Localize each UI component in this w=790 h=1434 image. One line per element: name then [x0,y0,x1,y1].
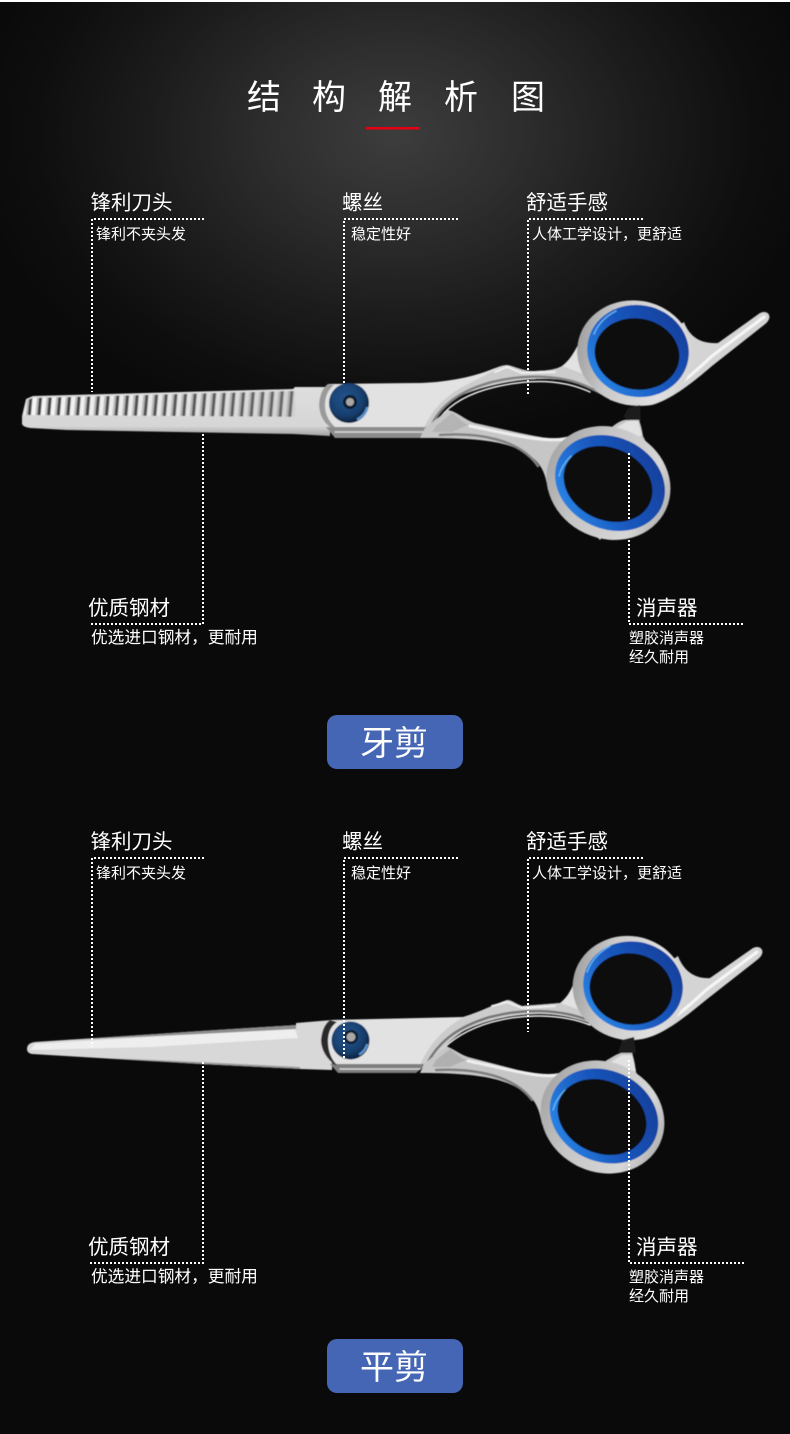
section: thinning shears callouts top [88,192,745,666]
callout: comfortable grip [526,192,682,394]
callout: comfortable grip: 舒适手感 [526,830,608,854]
lower handle [420,410,660,540]
callout: quality steel: 优选进口钢材，更耐用 [91,628,258,647]
callout: quality steel [88,1062,258,1286]
pivot screw [319,383,369,427]
section: flat shears callouts [88,830,745,1305]
flat blade [27,1020,332,1070]
pivot screw [321,1020,370,1065]
pivot bottom strip [330,1064,427,1073]
title: 结构解析图 [247,79,545,117]
callout: silencer: 经久耐用 [629,1288,689,1305]
pivot bottom strip [326,427,431,438]
callout: screw: 稳定性好 [351,865,411,882]
upper handle [319,312,769,428]
callout: comfortable grip: 人体工学设计，更舒适 [532,226,682,243]
upper handle [321,947,762,1065]
button: flat shears [327,1339,463,1393]
callout: screw: 螺丝 [342,192,383,214]
upper finger ring [569,291,701,415]
button: thinning shears [327,715,463,769]
callout: sharp tip: 锋利刀头 [90,192,172,214]
callout: quality steel: 优质钢材 [88,597,170,620]
callout: screw [342,192,458,386]
callout: silencer: 塑胶消声器 [629,1268,704,1286]
lower handle [420,1046,654,1172]
callout: sharp tip [90,192,204,392]
callout: silencer: 消声器 [636,1236,698,1259]
upper finger ring [564,927,694,1049]
callout: quality steel [88,434,258,647]
illustration: thinning shears [22,291,769,560]
callout: comfortable grip: 人体工学设计，更舒适 [532,865,682,882]
callout: screw [342,830,458,1059]
button: thinning shears: 牙剪 [360,725,428,763]
thinning blade [22,387,330,436]
callout: quality steel: 优质钢材 [88,1236,170,1259]
callout: silencer: 消声器 [636,597,698,620]
callout: silencer [629,540,745,666]
callout: comfortable grip: 舒适手感 [526,192,608,214]
callout: comfortable grip [526,830,682,1032]
lower finger ring [522,1040,683,1194]
callout: silencer: 经久耐用 [629,649,689,666]
callout: screw: 螺丝 [342,830,383,854]
callout: sharp tip [90,830,204,1047]
silencer [618,1037,636,1055]
callout: sharp tip: 锋利刀头 [90,830,172,854]
lower finger ring [528,406,689,560]
callout: silencer: 塑胶消声器 [629,629,704,647]
callout: silencer [629,1060,745,1305]
callout: quality steel: 优选进口钢材，更耐用 [91,1267,258,1286]
silencer [623,405,641,421]
callout: screw: 稳定性好 [351,226,411,243]
dotted line through lower ring hole [628,453,630,521]
button: flat shears: 平剪 [360,1349,428,1387]
illustration: flat shears [27,927,762,1194]
callout: sharp tip: 锋利不夹头发 [96,865,186,882]
callout: sharp tip: 锋利不夹头发 [96,226,186,243]
